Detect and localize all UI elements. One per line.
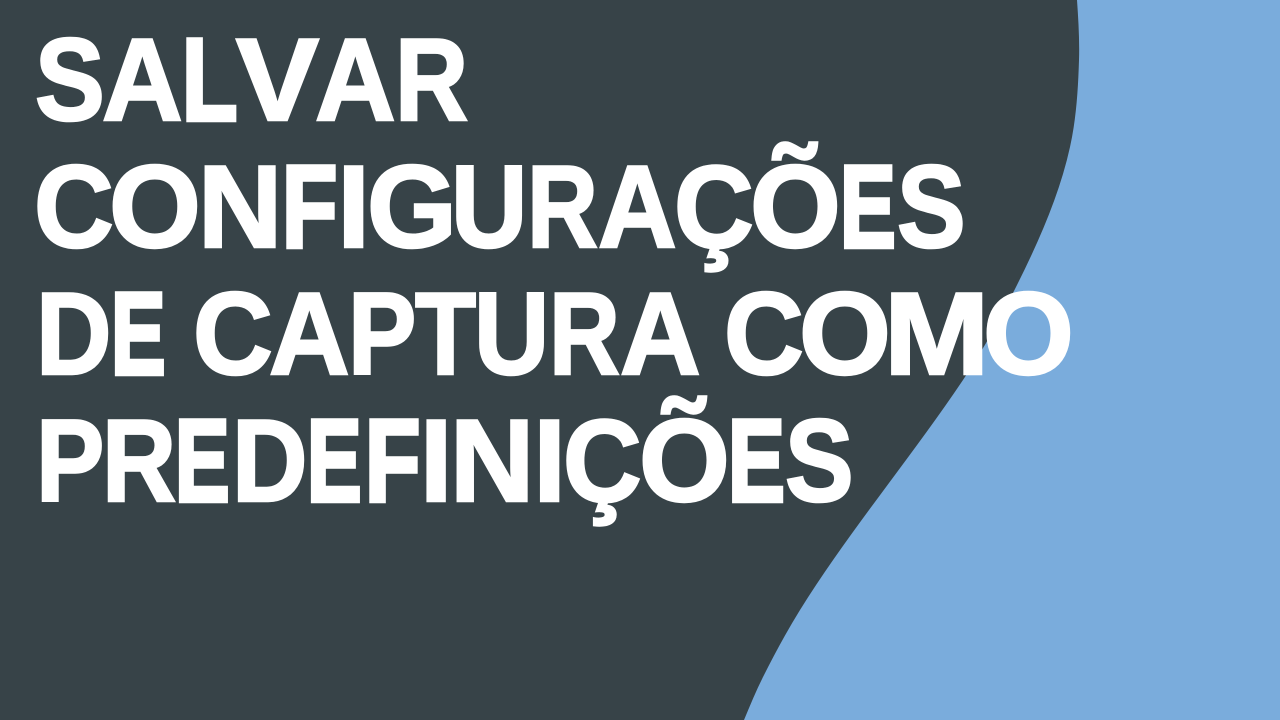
title line 3: P	[348, 268, 416, 399]
title line 4	[36, 395, 854, 527]
title line 4: S	[785, 395, 854, 526]
title line 3: T	[415, 268, 476, 399]
title line 3: C	[724, 268, 804, 399]
title line 4: R	[102, 395, 176, 526]
title line 3: O	[799, 268, 891, 399]
title line 4: I	[533, 395, 566, 526]
title line 4: Ç	[563, 395, 642, 526]
title line 4: P	[36, 395, 104, 526]
title line 1: A	[102, 14, 183, 145]
title line 4: N	[450, 395, 535, 526]
title line 3: A	[269, 268, 350, 399]
title line 2: U	[451, 141, 528, 272]
title line 3: A	[620, 268, 701, 399]
title line 2: S	[897, 141, 966, 272]
title line 2: I	[337, 141, 370, 272]
title line 1: L	[182, 14, 237, 145]
title line 3: E	[111, 268, 166, 399]
title line 4: E	[307, 395, 362, 526]
title line 4: F	[365, 395, 420, 526]
title line 3: R	[548, 268, 619, 399]
title line 3: C	[193, 268, 273, 399]
title line 4: I	[420, 395, 452, 526]
title line 4: E	[728, 395, 785, 526]
title line 1: R	[395, 14, 468, 145]
title line 2: A	[598, 141, 677, 272]
title line 3: U	[474, 268, 550, 399]
title line 2: G	[367, 141, 457, 272]
title line 4: D	[232, 395, 308, 526]
title line 2: C	[34, 141, 114, 272]
title line 1: A	[315, 14, 396, 145]
title line 2: Ç	[674, 141, 754, 272]
title line 2: O	[109, 141, 201, 272]
title line 2: E	[840, 141, 896, 272]
title line 2: R	[526, 141, 597, 272]
title line 3: O	[983, 268, 1074, 399]
title line 2: F	[282, 141, 337, 272]
title line 1: V	[236, 14, 319, 145]
title line 1: S	[35, 14, 105, 145]
title line 2: N	[198, 141, 283, 272]
title line 4: Õ	[639, 395, 730, 526]
title line 3	[36, 268, 1074, 399]
title line 1	[35, 14, 468, 145]
title line 2: Õ	[750, 141, 841, 272]
title line 3: D	[36, 268, 112, 399]
title line 4: E	[175, 395, 230, 526]
title line 2	[34, 141, 966, 273]
title line 3: M	[884, 268, 989, 399]
